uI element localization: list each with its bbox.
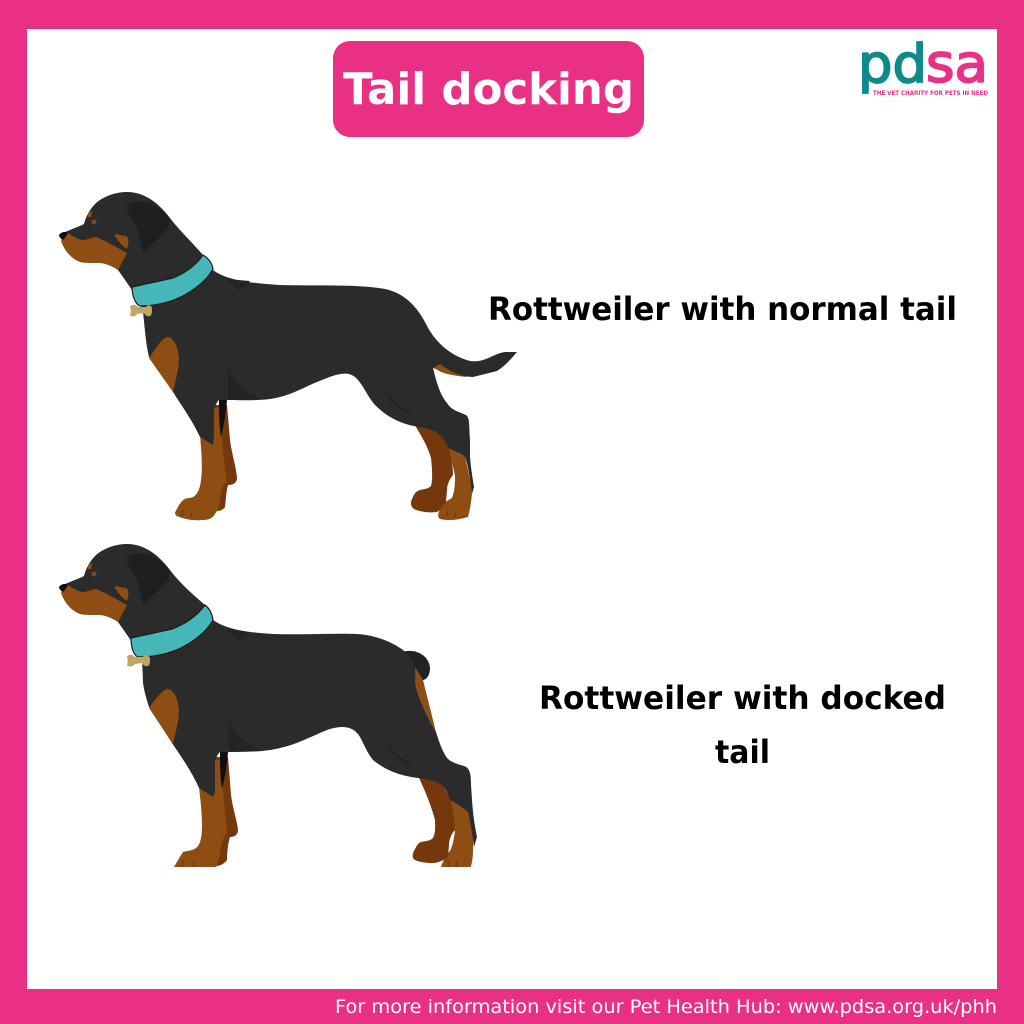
title badge: Tail docking [343, 64, 634, 115]
muzzle tan [61, 233, 127, 270]
label: docked tail [539, 679, 946, 771]
far front leg [212, 405, 237, 511]
PDSA logo: sa [926, 34, 988, 95]
collar [132, 255, 213, 306]
shoulder crease [226, 629, 250, 643]
nose [59, 232, 68, 240]
collar [131, 605, 213, 657]
bone tag [130, 305, 152, 316]
title badge [333, 41, 644, 137]
dog: Rottweiler with normal tail [59, 192, 517, 520]
PDSA logo: THE VET CHARITY FOR PETS IN NEED [873, 89, 989, 97]
eye [92, 220, 96, 224]
leg shadow [219, 400, 227, 437]
label: docked tail: Rottweiler with docked [539, 679, 946, 717]
thigh shadow [384, 389, 416, 415]
dog: Rottweiler with docked tail [59, 544, 477, 870]
far hind leg [440, 798, 473, 870]
label: normal tail: Rottweiler with normal tail [488, 290, 957, 328]
front paw toes [182, 510, 192, 518]
rear tan under tail [425, 345, 470, 377]
ear [127, 202, 170, 253]
far hind leg [438, 446, 472, 520]
ear [127, 554, 170, 605]
brow mark [88, 211, 92, 217]
near front leg and paw [175, 408, 227, 520]
near hind leg [413, 776, 455, 863]
near front leg and paw [172, 760, 227, 870]
cheek mark [114, 586, 128, 601]
chest tan [149, 689, 179, 744]
thigh shadow [386, 741, 418, 767]
rear tan stripe [415, 667, 436, 732]
chest tan [149, 337, 179, 392]
brow mark [88, 563, 92, 569]
far front leg [216, 757, 238, 866]
hind paw toes [448, 861, 457, 867]
label: docked tail: tail [715, 733, 770, 771]
docked tail stub [402, 651, 430, 680]
footer link text: For more information visit our Pet Health Hub: www.pdsa.org.uk/phh [335, 996, 997, 1018]
nose [59, 584, 68, 592]
chest shadow [228, 367, 262, 400]
black body with tail [59, 192, 517, 494]
eye [92, 572, 96, 576]
leg shadow [220, 752, 228, 789]
near hind leg [411, 424, 453, 512]
shoulder crease [226, 279, 250, 292]
bone tag [127, 655, 150, 666]
front paw toes [182, 860, 194, 867]
PDSA logo [858, 34, 989, 97]
hind paw toes [447, 510, 456, 517]
chest shadow [229, 750, 264, 752]
PDSA logo: pd [858, 34, 927, 95]
black body [59, 544, 477, 847]
muzzle tan [61, 585, 127, 622]
cheek mark [114, 234, 128, 249]
